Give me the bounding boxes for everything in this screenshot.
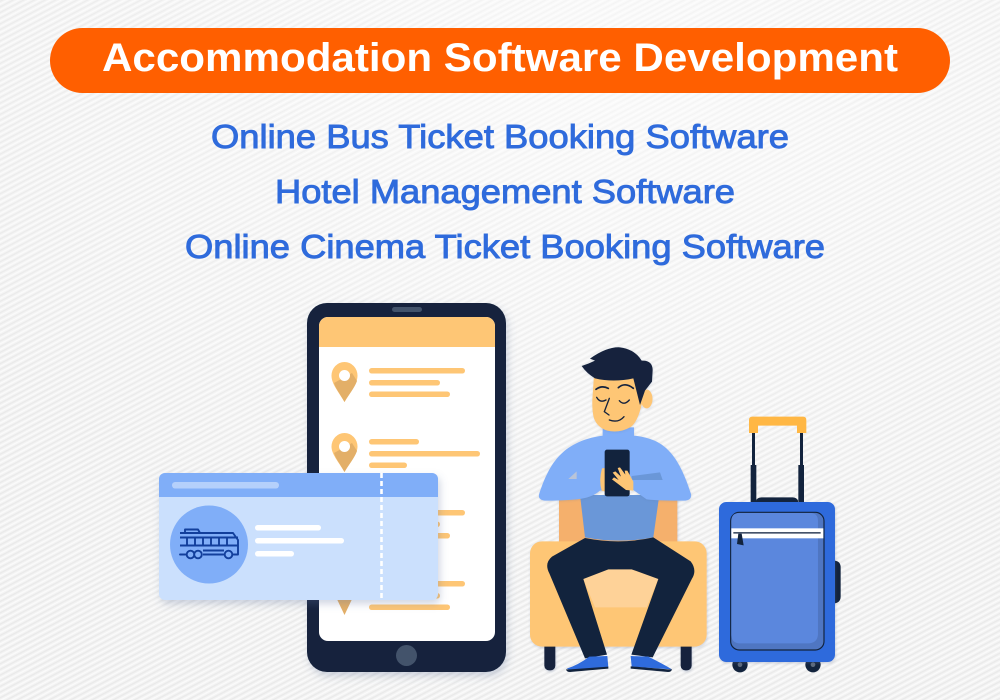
sleeve folds	[568, 471, 663, 480]
location entry 3	[369, 510, 465, 538]
location entry 2	[332, 433, 480, 472]
armchair	[530, 497, 707, 670]
fingers	[612, 467, 633, 491]
side handle	[835, 561, 841, 603]
person seated in armchair	[530, 347, 707, 672]
location entry 4	[335, 581, 465, 615]
bus icon badge	[170, 506, 248, 584]
software list: Online Bus Ticket Booking Software	[211, 118, 789, 155]
title banner	[50, 28, 950, 93]
case body	[719, 502, 835, 662]
sweater	[539, 427, 691, 501]
facial features	[596, 385, 633, 421]
software list: Online Cinema Ticket Booking Software	[185, 228, 825, 265]
shoes	[566, 656, 672, 672]
torso	[580, 495, 659, 541]
phone in hand	[605, 450, 630, 496]
location entry 1	[332, 362, 465, 402]
title banner: Accommodation Software Development	[102, 36, 898, 80]
software list: Hotel Management Software	[275, 173, 735, 210]
smartphone	[307, 303, 506, 672]
head	[582, 347, 653, 431]
hair	[582, 347, 653, 405]
software list	[185, 118, 825, 265]
suitcase	[719, 417, 841, 672]
bus ticket	[159, 473, 438, 600]
telescopic handle	[749, 417, 806, 503]
wheels	[732, 657, 821, 672]
trousers	[547, 537, 694, 658]
front panel	[731, 512, 824, 650]
hand behind phone	[600, 468, 605, 492]
ticket text lines	[255, 525, 344, 556]
